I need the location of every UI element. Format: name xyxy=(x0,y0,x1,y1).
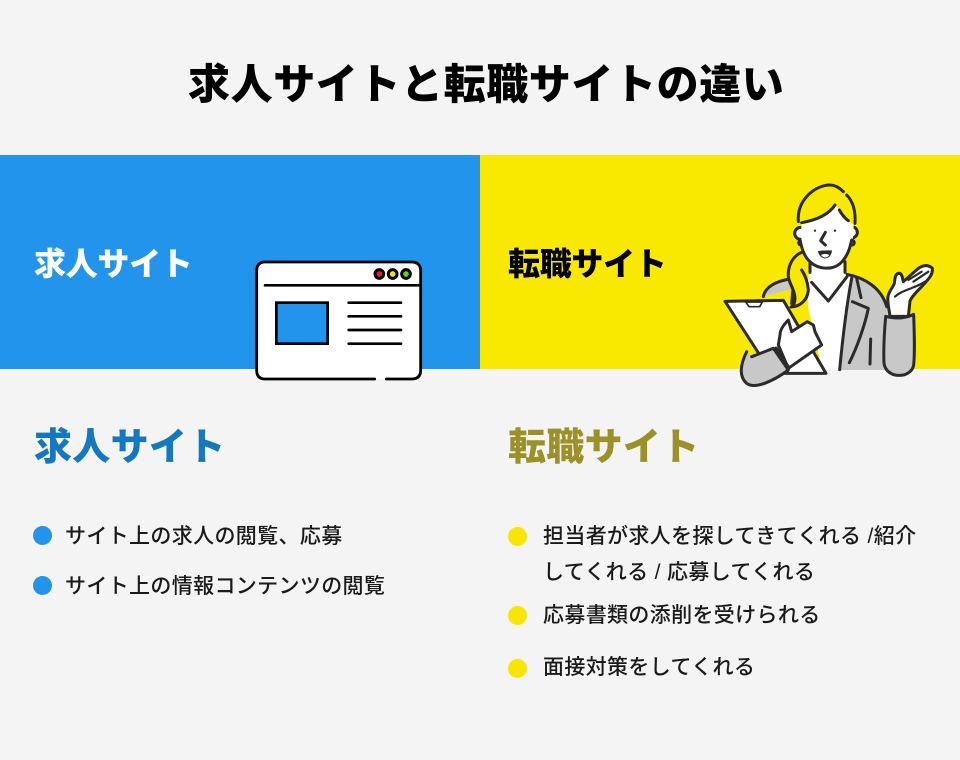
panel: job site banner xyxy=(0,155,480,369)
left sleeve xyxy=(741,348,788,385)
bullet xyxy=(33,576,52,595)
bullet xyxy=(508,659,527,678)
eyes nose mouth xyxy=(814,230,816,232)
bullet xyxy=(508,527,527,546)
item text: 面接対策をしてくれる xyxy=(543,656,755,679)
item text: サイト上の求人の閲覧、応募 xyxy=(65,525,343,548)
item text: 応募書類の添削を受けられる xyxy=(543,604,821,627)
bullet xyxy=(508,606,527,625)
raised hand xyxy=(888,266,932,316)
item text continued: してくれる / 応募してくれる xyxy=(543,561,815,584)
item text: サイト上の情報コンテンツの閲覧 xyxy=(65,575,385,598)
hair xyxy=(798,185,843,222)
list: career agency features xyxy=(508,524,916,679)
clipboard xyxy=(725,300,826,373)
banner heading: job site: 求人サイト xyxy=(34,246,193,282)
bullet xyxy=(33,526,52,545)
panel: career agency banner xyxy=(480,155,960,369)
jacket body xyxy=(763,274,887,370)
icon: browser window xyxy=(255,260,422,380)
heading: career agency detail: 転職サイト xyxy=(508,427,700,469)
illustration: businesswoman with clipboard xyxy=(723,184,934,387)
hand on clipboard xyxy=(778,320,822,368)
title: 求人サイトと転職サイトの違い xyxy=(188,61,784,108)
item text: 担当者が求人を探してきてくれる /紹介 xyxy=(543,525,916,548)
face xyxy=(801,205,854,268)
right sleeve xyxy=(884,314,914,375)
ponytail xyxy=(788,252,808,307)
ears and earrings xyxy=(795,227,807,239)
list: job site features xyxy=(33,525,385,598)
banner heading: career agency: 転職サイト xyxy=(508,246,667,282)
shirt and neck xyxy=(808,262,852,370)
heading: job site detail: 求人サイト xyxy=(34,427,226,469)
